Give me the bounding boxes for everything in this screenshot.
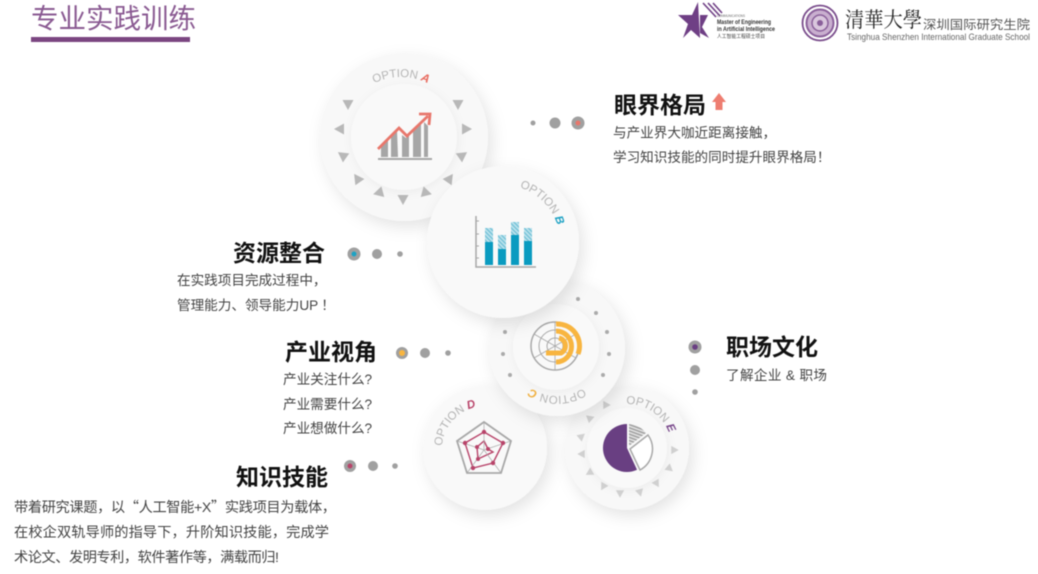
text: 知识技能: 在校企双轨导师的指导下，升阶知识技能，完成学	[14, 524, 329, 541]
dots: C	[396, 347, 451, 359]
circle: option D	[425, 399, 554, 520]
text: 职场文化	[726, 334, 827, 383]
logo: artificial intelligence master programme: 人工智能工程硕士项目	[717, 33, 765, 40]
logo: artificial intelligence master programme: Master of Engineering	[717, 20, 771, 26]
text: 产业视角	[283, 339, 377, 436]
dots: A	[530, 116, 584, 130]
icon: rising bar chart	[378, 114, 432, 160]
text: 资源整合: 在实践项目完成过程中，	[177, 273, 327, 288]
icon: radar chart	[457, 422, 511, 473]
triangle ring	[576, 401, 679, 498]
logo: Tsinghua Shenzhen International Graduate School: 清華大學	[845, 4, 922, 34]
circle: option E	[567, 395, 696, 520]
text: 产业视角: 产业关注什么?	[283, 372, 373, 387]
text: 产业视角: 产业需要什么?	[283, 397, 373, 412]
logo: artificial intelligence master programme: COMMUNICATIONS	[717, 13, 745, 18]
text: 知识技能: 带着研究课题，以“人工智能+X”实践项目为载体，	[14, 497, 336, 517]
text: 眼界格局: 眼界格局	[614, 92, 706, 118]
label: option A: OPTION A	[372, 68, 430, 84]
label: option D: OPTION D	[434, 399, 476, 446]
text: 知识技能: 术论文、发明专利，软件著作等，满载而归!	[14, 549, 279, 566]
text: 眼界格局: 学习知识技能的同时提升眼界格局！	[613, 149, 830, 165]
text: 知识技能: 知识技能	[236, 464, 328, 490]
circle: option B	[429, 169, 586, 328]
label: option B: OPTION B	[520, 180, 565, 225]
icon: stacked bars	[476, 216, 536, 267]
title: 专业实践训练	[31, 3, 196, 34]
circle: option A	[322, 68, 496, 230]
text: 眼界格局: 与产业界大咖近距离接触，	[613, 124, 776, 140]
dots: D	[344, 460, 398, 472]
label: option C: OPTION C	[527, 388, 586, 404]
logo: artificial intelligence master programme	[678, 2, 776, 40]
text: 产业视角: 产业想做什么?	[283, 421, 373, 436]
circle: option C	[490, 294, 632, 426]
text: 资源整合: 管理能力、领导能力UP！	[177, 298, 335, 313]
text: 眼界格局	[613, 92, 830, 165]
dots: E	[688, 340, 702, 395]
icon: up arrow	[712, 93, 726, 110]
logo: Tsinghua Shenzhen International Graduate School	[802, 4, 1031, 43]
text: 职场文化: 了解企业 & 职场	[726, 367, 827, 383]
text: 知识技能	[14, 464, 336, 566]
text: 资源整合: 资源整合	[233, 240, 325, 266]
text: 产业视角: 产业视角	[285, 339, 377, 365]
icon: radial chart	[531, 322, 580, 370]
logo: artificial intelligence master programme: in Artificial Intelligence	[717, 27, 776, 33]
logo: Tsinghua Shenzhen International Graduate School: 深圳国际研究生院	[923, 17, 1031, 32]
label: option E: OPTION E	[626, 396, 677, 432]
text: 职场文化: 职场文化	[726, 334, 818, 360]
triangle ring	[334, 100, 472, 205]
icon: pie chart	[603, 424, 652, 472]
text: 资源整合	[177, 240, 335, 313]
dots: B	[348, 248, 403, 260]
